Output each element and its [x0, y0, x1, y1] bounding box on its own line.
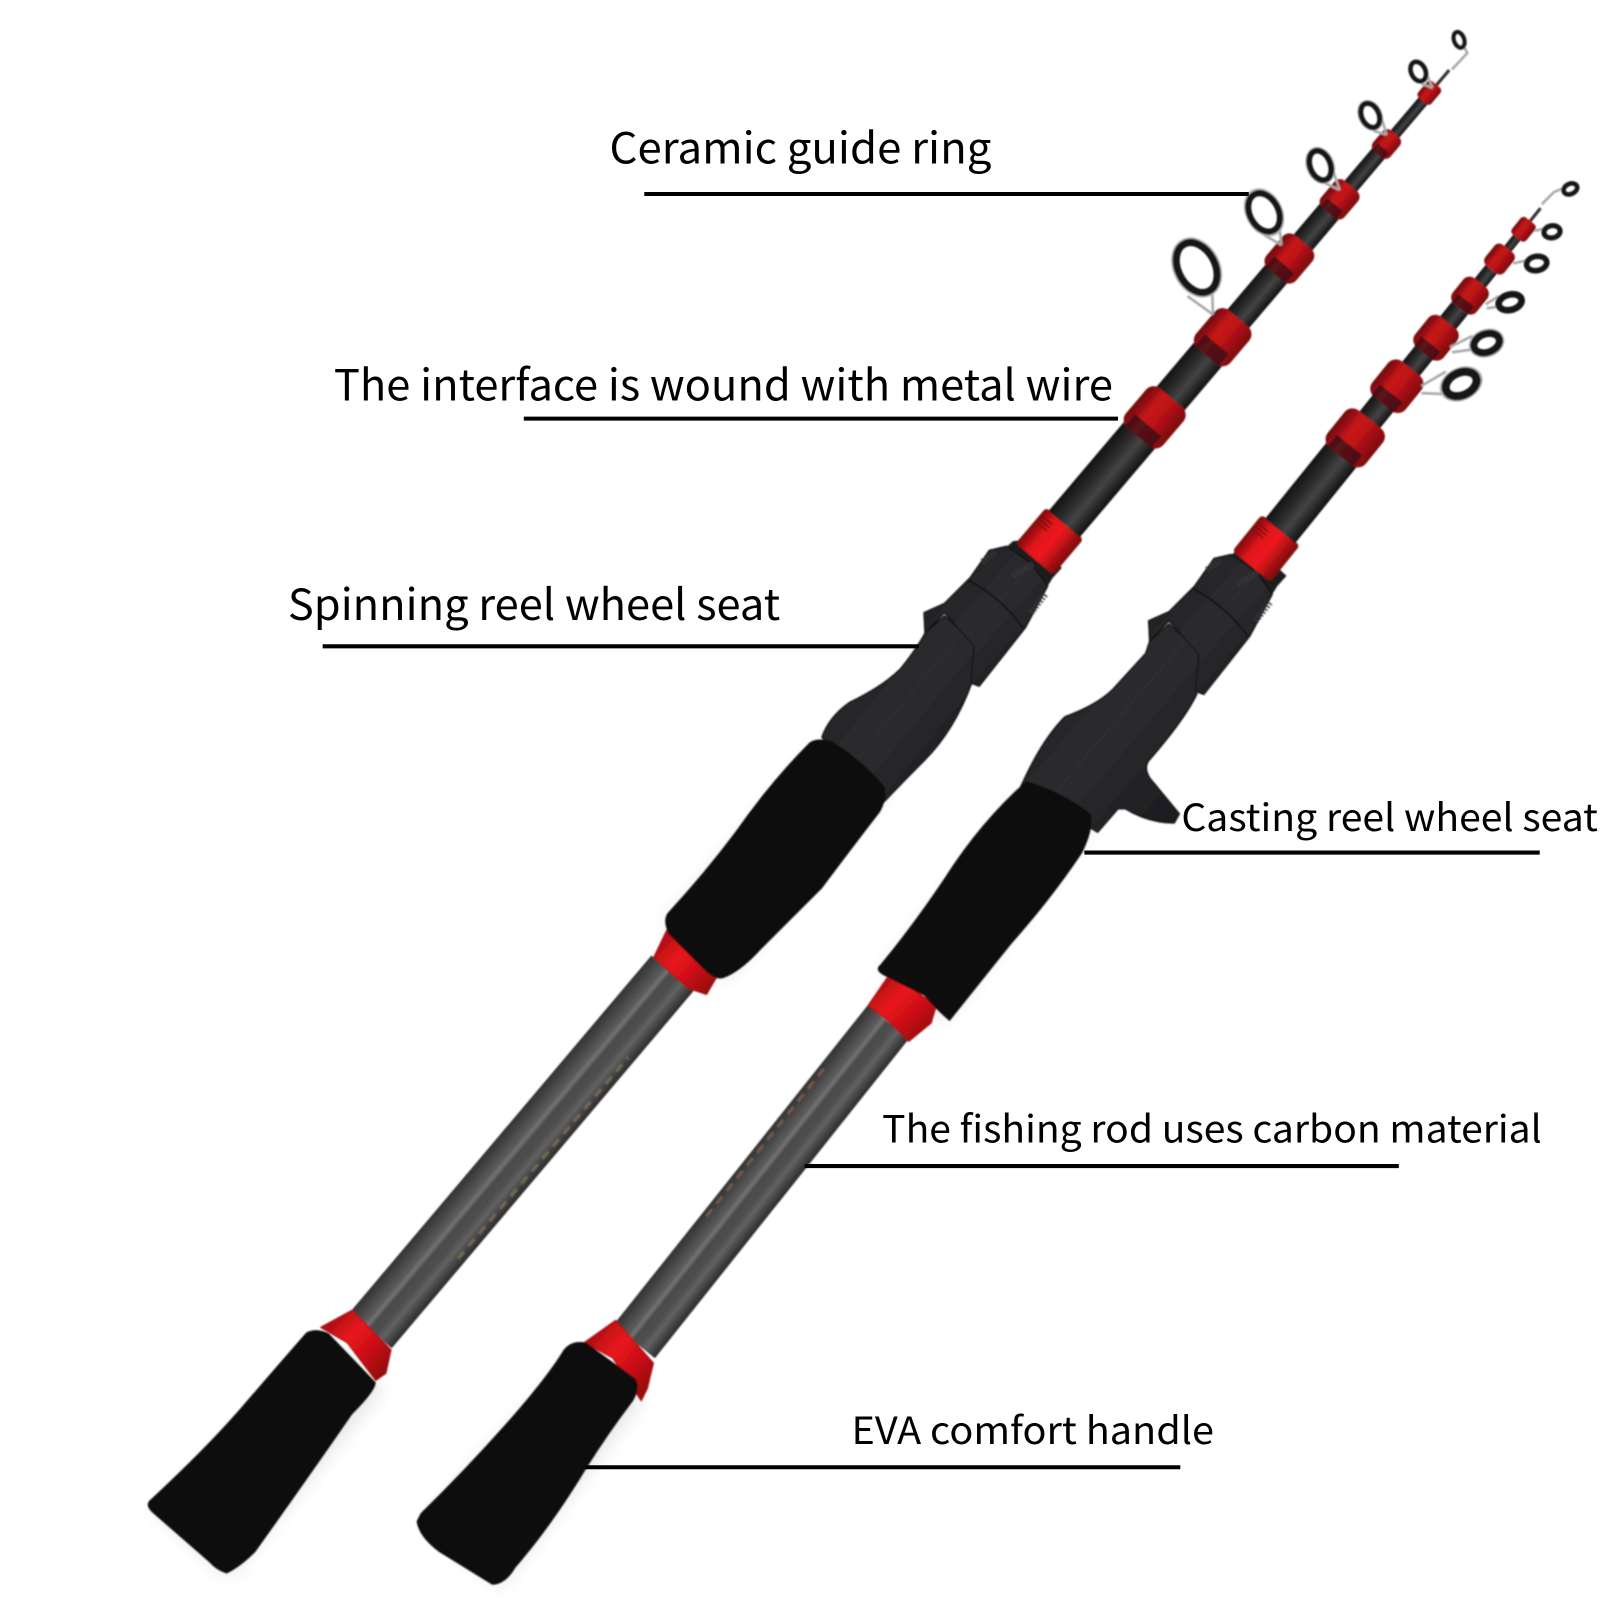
- ceramic guide rings: [1162, 30, 1467, 314]
- callout: spinning reel wheel seat: Spinning reel wheel seat: [288, 571, 780, 633]
- callout: carbon material: The fishing rod uses carbon material: [882, 1099, 1542, 1154]
- casting reel seat with trigger: [1021, 624, 1200, 832]
- rear grip ring: [321, 1310, 391, 1380]
- upper telescopic sections and wire-wound joints: [1045, 54, 1468, 540]
- right rod: casting model: [417, 181, 1579, 1588]
- red metal ring: [1232, 515, 1300, 582]
- reel seat collar: [1149, 547, 1287, 694]
- ceramic guide rings: [1421, 181, 1579, 407]
- butt handle: [148, 1330, 376, 1573]
- lower carbon shaft: [613, 1005, 909, 1358]
- callout: ceramic guide ring: Ceramic guide ring: [610, 114, 991, 176]
- callout: interface wound with wire: The interface is wound with metal wire: [334, 351, 1113, 413]
- callout: casting reel wheel seat: Casting reel wheel seat: [1181, 787, 1598, 842]
- spinning reel seat: [822, 616, 975, 802]
- fore grip ring: [653, 928, 721, 994]
- lower carbon shaft: [350, 955, 694, 1348]
- fore grip ring: [868, 973, 936, 1041]
- red metal ring: [1016, 507, 1084, 575]
- butt handle: [417, 1342, 638, 1585]
- EVA fore grip: [665, 739, 886, 978]
- reel seat collar: [924, 539, 1062, 686]
- EVA fore grip: [878, 781, 1091, 1021]
- upper telescopic sections and wire-wound joints: [1261, 193, 1560, 546]
- callout: EVA comfort handle: EVA comfort handle: [852, 1400, 1214, 1455]
- left rod: spinning model: [148, 30, 1468, 1578]
- rear grip ring: [584, 1320, 653, 1401]
